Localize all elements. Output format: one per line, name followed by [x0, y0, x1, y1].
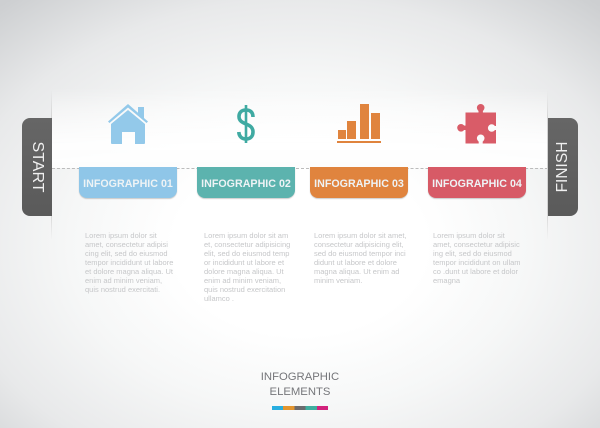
tab: infographic 03 [310, 167, 408, 198]
tab: infographic 02: INFOGRAPHIC 02 [201, 178, 291, 190]
tab: infographic 03: INFOGRAPHIC 03 [314, 178, 404, 190]
text: column 2: Lorem ipsum dolor sit am et, consectetur adipisicing elit, sed do eiusmod temp or incididunt ut labore et dolore magna aliqua. Ut enim ad minim veniam, quis nostrud exercitation ullamco . [204, 231, 290, 303]
footer title [261, 371, 339, 398]
tab: infographic 01 [79, 167, 177, 198]
colour strip [272, 406, 328, 410]
icon: dollar [237, 105, 255, 143]
tab: infographic 04 [428, 167, 526, 198]
text: column 1: Lorem ipsum dolor sit amet, consectetur adipisi cing elit, sed do eiusmod tempor incididunt ut labore et dolore magna aliqua. Ut enim ad minim veniam, quis nostrud exercitati. [85, 231, 173, 294]
footer title: ELEMENTS [270, 386, 330, 398]
text: column 3: Lorem ipsum dolor sit amet, consectetur adipisicing elit, sed do eiusmod tempor inci didunt ut labore et dolore magna aliqua. Ut enim ad minim veniam. [314, 231, 407, 285]
start tab [22, 118, 52, 216]
right fold line [547, 90, 548, 240]
text: column 4: Lorem ipsum dolor sit amet, consectetur adipisic ing elit, sed do eiusmod tempor incididunt on ullam co .dunt ut labore et dolor emagna [433, 231, 521, 285]
finish tab [548, 118, 578, 216]
finish tab: FINISH [554, 142, 571, 192]
icon: puzzle piece [457, 104, 496, 144]
icon: house [108, 104, 148, 144]
left fold line [51, 90, 52, 240]
start tab: START [29, 142, 46, 192]
tab: infographic 02 [197, 167, 295, 198]
tab: infographic 01: INFOGRAPHIC 01 [83, 178, 173, 190]
white panel [52, 88, 548, 168]
icon: bar chart [337, 104, 381, 143]
tab: infographic 04: INFOGRAPHIC 04 [432, 178, 522, 190]
footer title: INFOGRAPHIC [261, 371, 339, 383]
